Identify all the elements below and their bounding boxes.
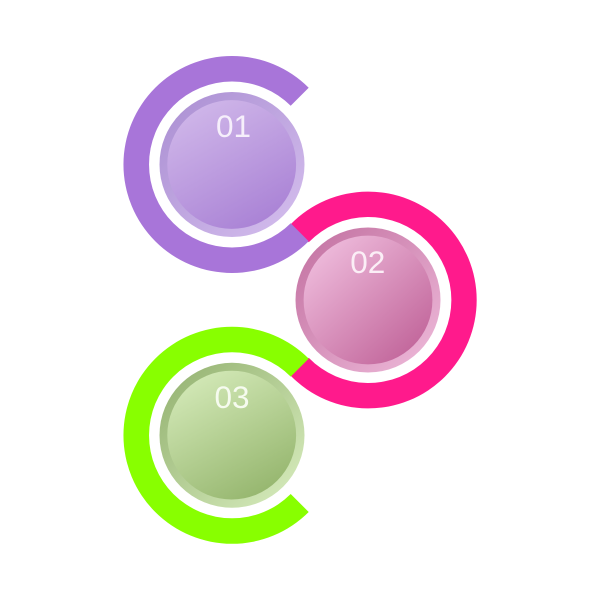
number: 02: 02 [350, 244, 385, 280]
step 01: purple ring and disc [123, 56, 309, 273]
ring: purple [123, 56, 309, 273]
disc: 02 [296, 228, 440, 372]
number: 01: 01 [216, 108, 251, 144]
ring: pink [291, 192, 477, 408]
number: 03: 03 [214, 379, 250, 415]
step 02: pink ring and disc [291, 192, 477, 408]
ring: green [123, 327, 309, 544]
disc: 03 [160, 363, 304, 508]
step 03: green ring and disc [123, 327, 309, 544]
disc: 01 [160, 92, 304, 237]
